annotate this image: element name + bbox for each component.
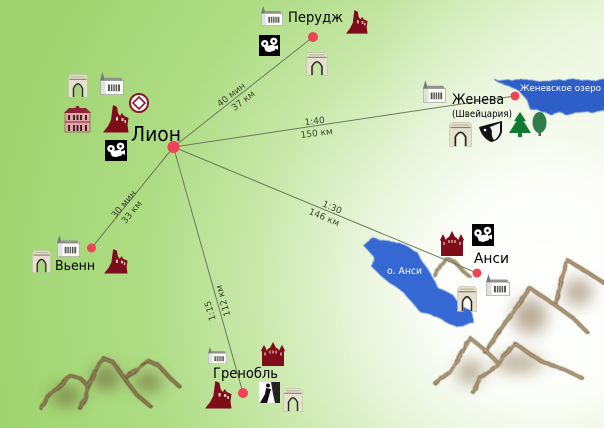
city: Geneva: Женева <box>452 92 504 108</box>
city: Geneva <box>423 80 546 146</box>
route labels: 1:40 <box>304 116 326 128</box>
icon: fir tree <box>509 112 531 137</box>
icon: climber <box>259 382 280 403</box>
city: Geneva: (Швейцария) <box>452 109 512 120</box>
route labels: 146 км <box>307 207 341 229</box>
route labels: 40 мин <box>216 81 248 109</box>
label: Женевское озеро: Женевское озеро <box>520 84 601 94</box>
mountains: lower right <box>435 260 604 392</box>
city: Perugia: Перудж <box>288 10 343 26</box>
city: Perugia <box>259 6 368 76</box>
route labels: 30 мин <box>110 189 139 221</box>
lake: Annecy <box>363 238 473 327</box>
city: Lyon <box>64 72 181 161</box>
city: Annecy <box>440 224 510 311</box>
icon: tree <box>532 112 546 136</box>
city: Grenoble <box>205 342 303 412</box>
route labels: 33 км <box>120 199 145 226</box>
icon: palace <box>64 106 91 132</box>
city: Vienne: Вьенн <box>55 259 95 274</box>
small mountain near Annecy <box>435 258 470 277</box>
route lines <box>92 37 515 393</box>
city: Lyon: Лион <box>131 122 181 146</box>
city: Grenoble: Гренобль <box>213 366 278 382</box>
icon: theatre mask <box>479 121 502 142</box>
city: Annecy: Анси <box>474 251 509 267</box>
lake: Geneva <box>494 80 604 114</box>
route labels: 1:30 <box>321 200 343 217</box>
route labels: 112 км <box>215 284 233 317</box>
label: о. Анси: о. Анси <box>387 266 422 277</box>
route labels <box>110 81 343 322</box>
route labels: 150 км <box>300 127 333 141</box>
mountains: lower left <box>41 358 180 408</box>
route labels: 37 км <box>230 89 257 114</box>
city: Vienne <box>32 235 128 274</box>
route labels: 1:15 <box>203 299 219 322</box>
icon: world heritage <box>130 94 148 112</box>
